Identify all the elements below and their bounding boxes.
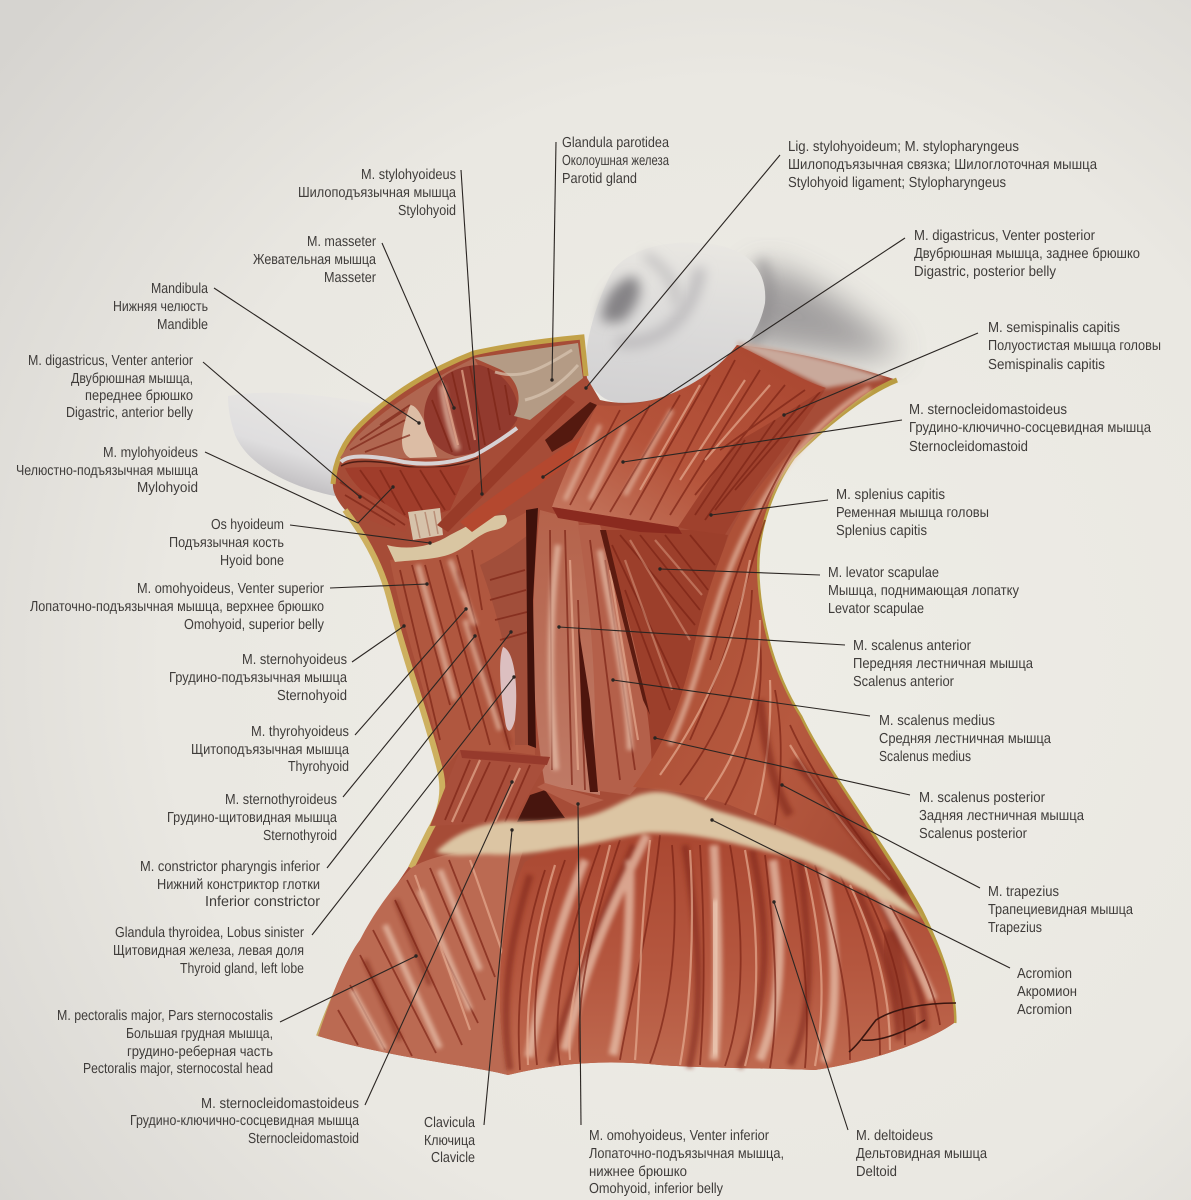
label: semispinalis capitis: Semispinalis capitis xyxy=(988,357,1105,373)
label: sternocleidomastoid upper xyxy=(623,402,1152,462)
label: omohyoid inferior belly: Лопаточно-подъязычная мышца, xyxy=(589,1146,784,1162)
label: mylohyoid: Челюстно-подъязычная мышца xyxy=(16,463,199,479)
label: acromion: Acromion xyxy=(1017,1002,1072,1018)
stylohyoid and digastric posterior belly xyxy=(437,395,575,532)
label: inferior constrictor xyxy=(140,632,511,910)
label: levator scapulae: M. levator scapulae xyxy=(828,565,939,581)
label: acromion xyxy=(712,820,1077,1018)
infrahyoid strap muscles xyxy=(390,510,535,770)
label: clavicle: Clavicula xyxy=(424,1115,476,1131)
sternocleidomastoid upper part xyxy=(552,342,885,534)
label: sternocleidomastoid lower xyxy=(130,782,512,1147)
label: scalenus posterior: Scalenus posterior xyxy=(919,826,1027,842)
label: parotid gland: Околоушная железа xyxy=(562,153,670,169)
label: inferior constrictor: Нижний констриктор глотки xyxy=(157,877,320,893)
label: thyroid gland: Thyroid gland, left lobe xyxy=(180,961,304,977)
label: scalenus anterior xyxy=(559,627,1034,690)
label: parotid gland: Parotid gland xyxy=(562,171,637,187)
label: pectoralis major: грудино-реберная часть xyxy=(127,1044,273,1060)
label: scalenus posterior xyxy=(655,738,1085,842)
label: deltoid: Deltoid xyxy=(856,1164,897,1180)
label: omohyoid superior belly: M. omohyoideus, Venter superior xyxy=(137,581,324,597)
label: masseter: Жевательная мышца xyxy=(253,252,377,268)
label: stylohyoid ligament: Lig. stylohyoideum; M. stylopharyngeus xyxy=(788,139,1019,155)
label: omohyoid inferior belly: M. omohyoideus, Venter inferior xyxy=(589,1128,769,1144)
trapezius xyxy=(633,382,920,915)
label: hyoid bone: Os hyoideum xyxy=(211,517,284,533)
label: thyrohyoid: Thyrohyoid xyxy=(288,759,349,775)
label: acromion: Акромион xyxy=(1017,984,1077,1000)
label: sternohyoid: M. sternohyoideus xyxy=(242,652,347,668)
label: pectoralis major: Большая грудная мышца, xyxy=(126,1026,273,1042)
label: parotid gland: Glandula parotidea xyxy=(562,135,670,151)
label: sternothyroid: Sternothyroid xyxy=(263,828,337,844)
signature xyxy=(849,1003,956,1052)
label: sternocleidomastoid lower: M. sternocleidomastoideus xyxy=(201,1096,359,1112)
label: scalenus medius: Scalenus medius xyxy=(879,749,971,765)
mandibular muscle and masseter xyxy=(340,343,583,468)
label: splenius capitis: Ременная мышца головы xyxy=(836,505,989,521)
label: parotid gland xyxy=(552,135,670,380)
label: stylohyoid: M. stylohyoideus xyxy=(361,167,456,183)
label: omohyoid inferior belly xyxy=(578,804,784,1197)
label: trapezius: Трапециевидная мышца xyxy=(988,902,1134,918)
label: thyrohyoid: Щитоподъязычная мышца xyxy=(191,742,350,758)
label: semispinalis capitis xyxy=(784,320,1161,415)
label: sternocleidomastoid upper: Sternocleidomastoid xyxy=(909,439,1028,455)
hyoid bone xyxy=(387,508,507,562)
label: thyrohyoid: M. thyrohyoideus xyxy=(251,724,349,740)
label: clavicle: Ключица xyxy=(424,1133,476,1149)
label: mylohyoid: M. mylohyoideus xyxy=(103,445,198,461)
label: thyroid gland: Glandula thyroidea, Lobus sinister xyxy=(115,925,304,941)
label: masseter: Masseter xyxy=(324,270,376,286)
white fascia line xyxy=(341,428,517,464)
label: sternocleidomastoid lower: Sternocleidomastoid xyxy=(248,1131,359,1147)
label: scalenus medius: Средняя лестничная мышца xyxy=(879,731,1052,747)
label: scalenus anterior: Передняя лестничная мышца xyxy=(853,656,1034,672)
fat border right xyxy=(757,380,954,1023)
label: inferior constrictor: Inferior constrictor xyxy=(205,894,320,910)
label: trapezius xyxy=(782,785,1134,936)
label: levator scapulae xyxy=(660,565,1020,617)
label: hyoid bone: Hyoid bone xyxy=(220,553,284,569)
label: sternothyroid xyxy=(167,636,475,844)
label: thyroid gland: Щитовидная железа, левая доля xyxy=(113,943,304,959)
label: deltoid: M. deltoideus xyxy=(856,1128,933,1144)
label: omohyoid inferior belly: нижнее брюшко xyxy=(589,1164,687,1180)
parotid gland xyxy=(474,343,583,420)
label: stylohyoid xyxy=(298,167,482,494)
label: stylohyoid: Stylohyoid xyxy=(398,203,456,219)
label: splenius capitis: M. splenius capitis xyxy=(836,487,945,503)
label: mylohyoid: Mylohyoid xyxy=(137,480,198,496)
label: sternohyoid xyxy=(169,626,404,704)
label: digastric posterior belly: Digastric, posterior belly xyxy=(914,264,1057,280)
label: scalenus medius xyxy=(613,680,1052,765)
label: masseter: M. masseter xyxy=(307,234,376,250)
head skin: chin and ear xyxy=(228,243,900,497)
label: sternothyroid: M. sternothyroideus xyxy=(225,792,337,808)
clavicle and acromion pale tendon band xyxy=(436,792,922,919)
deltoid xyxy=(500,810,954,1075)
label: digastric posterior belly: Двубрюшная мышца, заднее брюшко xyxy=(914,246,1140,262)
label: pectoralis major: Pectoralis major, sternocostal head xyxy=(83,1061,273,1077)
label: hyoid bone: Подъязычная кость xyxy=(169,535,284,551)
label: levator scapulae: Levator scapulae xyxy=(828,601,924,617)
splenius capitis xyxy=(678,388,826,540)
label: digastric anterior belly: Двубрюшная мышца, xyxy=(71,371,193,387)
label: scalenus posterior: M. scalenus posterior xyxy=(919,790,1045,806)
label: mandible xyxy=(113,281,419,423)
digastric anterior belly xyxy=(336,478,410,532)
label: mandible: Нижняя челюсть xyxy=(113,299,208,315)
label: trapezius: M. trapezius xyxy=(988,884,1059,900)
label: clavicle xyxy=(424,830,512,1166)
label: stylohyoid ligament xyxy=(586,139,1098,388)
anatomy illustration: neck and shoulder muscles xyxy=(318,337,956,1075)
label: pectoralis major xyxy=(57,956,416,1077)
label: inferior constrictor: M. constrictor pharyngis inferior xyxy=(140,859,320,875)
label: omohyoid superior belly: Лопаточно-подъязычная мышца, верхнее брюшко xyxy=(30,599,324,615)
label: omohyoid superior belly xyxy=(30,581,427,633)
sternocleidomastoid lower stump xyxy=(430,750,550,826)
label: stylohyoid: Шилоподъязычная мышца xyxy=(298,185,457,201)
label: sternocleidomastoid upper: Грудино-ключично-сосцевидная мышца xyxy=(909,420,1152,436)
label: scalenus posterior: Задняя лестничная мышца xyxy=(919,808,1085,824)
label: omohyoid superior belly: Omohyoid, superior belly xyxy=(184,617,325,633)
label: clavicle: Clavicle xyxy=(431,1150,475,1166)
dark cleft xyxy=(526,508,538,748)
label: scalenus medius: M. scalenus medius xyxy=(879,713,995,729)
label: mandible: Mandibula xyxy=(151,281,209,297)
label: thyroid gland xyxy=(113,677,514,977)
thyroid lobe xyxy=(500,647,516,731)
label: scalenus anterior: Scalenus anterior xyxy=(853,674,954,690)
label: acromion: Acromion xyxy=(1017,966,1072,982)
label: trapezius: Trapezius xyxy=(988,920,1042,936)
label: sternothyroid: Грудино-щитовидная мышца xyxy=(167,810,338,826)
label: sternocleidomastoid upper: M. sternocleidomastoideus xyxy=(909,402,1067,418)
cut end of SCM xyxy=(552,507,682,534)
label: splenius capitis xyxy=(711,487,989,539)
label: semispinalis capitis: M. semispinalis capitis xyxy=(988,320,1120,336)
omohyoid inferior belly and deep space xyxy=(517,783,604,822)
label: scalenus anterior: M. scalenus anterior xyxy=(853,638,971,654)
label: levator scapulae: Мышца, поднимающая лопатку xyxy=(828,583,1020,599)
label: digastric posterior belly: M. digastricus, Venter posterior xyxy=(914,228,1095,244)
mylohyoid xyxy=(345,465,470,525)
label: deltoid xyxy=(774,902,988,1180)
label: thyrohyoid xyxy=(191,609,466,775)
label: sternocleidomastoid lower: Грудино-ключично-сосцевидная мышца xyxy=(130,1113,360,1129)
levator scapulae xyxy=(600,530,728,770)
label: mylohyoid xyxy=(16,445,393,523)
label: sternohyoid: Грудино-подъязычная мышца xyxy=(169,670,348,686)
label: digastric posterior belly xyxy=(543,228,1140,477)
label: splenius capitis: Splenius capitis xyxy=(836,523,927,539)
label: digastric anterior belly xyxy=(28,353,360,497)
label: digastric anterior belly: Digastric, anterior belly xyxy=(66,405,194,421)
label: pectoralis major: M. pectoralis major, Pars sternocostalis xyxy=(57,1008,273,1024)
label: sternohyoid: Sternohyoid xyxy=(277,688,347,704)
label: digastric anterior belly: M. digastricus, Venter anterior xyxy=(28,353,193,369)
label: stylohyoid ligament: Шилоподъязычная связка; Шилоглоточная мышца xyxy=(788,157,1098,173)
label: hyoid bone xyxy=(169,517,430,569)
label: omohyoid inferior belly: Omohyoid, inferior belly xyxy=(589,1181,724,1197)
pectoralis major xyxy=(318,845,525,1075)
label: digastric anterior belly: переднее брюшко xyxy=(85,388,193,404)
label: mandible: Mandible xyxy=(157,317,208,333)
label: stylohyoid ligament: Stylohyoid ligament; Stylopharyngeus xyxy=(788,175,1006,191)
label: semispinalis capitis: Полуостистая мышца головы xyxy=(988,338,1161,354)
label: deltoid: Дельтовидная мышца xyxy=(856,1146,988,1162)
scalenus anterior and medius xyxy=(533,510,652,795)
label: masseter xyxy=(253,234,454,408)
fat border left xyxy=(333,337,586,484)
